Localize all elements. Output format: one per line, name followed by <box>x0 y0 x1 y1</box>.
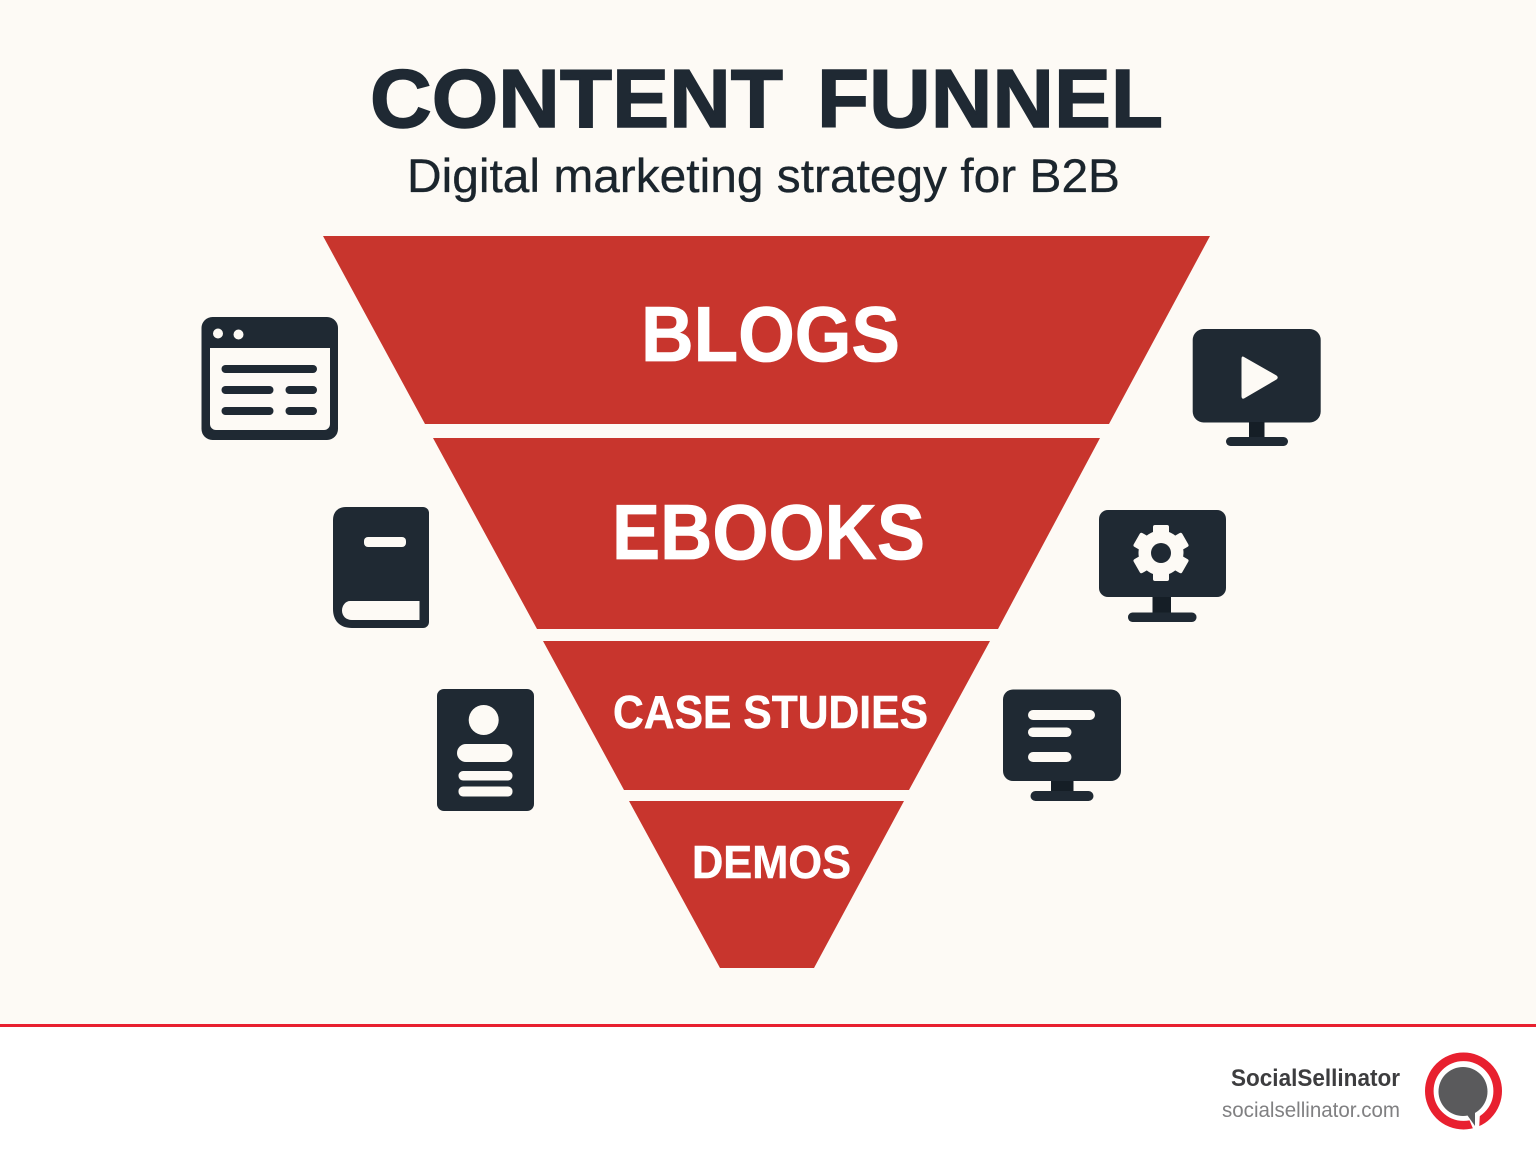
icon: text monitor <box>1003 690 1121 801</box>
title <box>370 52 1163 145</box>
logo <box>1429 1057 1498 1131</box>
funnel tier: demos: DEMOS <box>692 836 851 888</box>
subtitle: Digital marketing strategy for B2B <box>407 149 1120 202</box>
funnel tier: demos <box>629 801 904 968</box>
icon: settings monitor <box>1099 510 1226 622</box>
funnel tier: ebooks: EBOOKS <box>612 488 925 576</box>
funnel <box>323 236 1210 968</box>
funnel tier: case studies <box>543 641 990 790</box>
title: FUNNEL <box>817 52 1163 145</box>
icon: profile document <box>437 689 534 811</box>
funnel tier: case studies: CASE STUDIES <box>613 686 928 738</box>
footer <box>0 1024 1536 1154</box>
funnel tier: blogs <box>323 236 1210 424</box>
title: CONTENT <box>370 52 783 145</box>
funnel tier: blogs: BLOGS <box>641 290 900 378</box>
icon: book <box>333 507 429 628</box>
icon: browser window <box>202 317 338 440</box>
brand url: socialsellinator.com <box>1222 1099 1400 1122</box>
icon: video monitor <box>1193 329 1321 446</box>
funnel tier: ebooks <box>433 438 1100 629</box>
brand name: SocialSellinator <box>1231 1065 1400 1092</box>
